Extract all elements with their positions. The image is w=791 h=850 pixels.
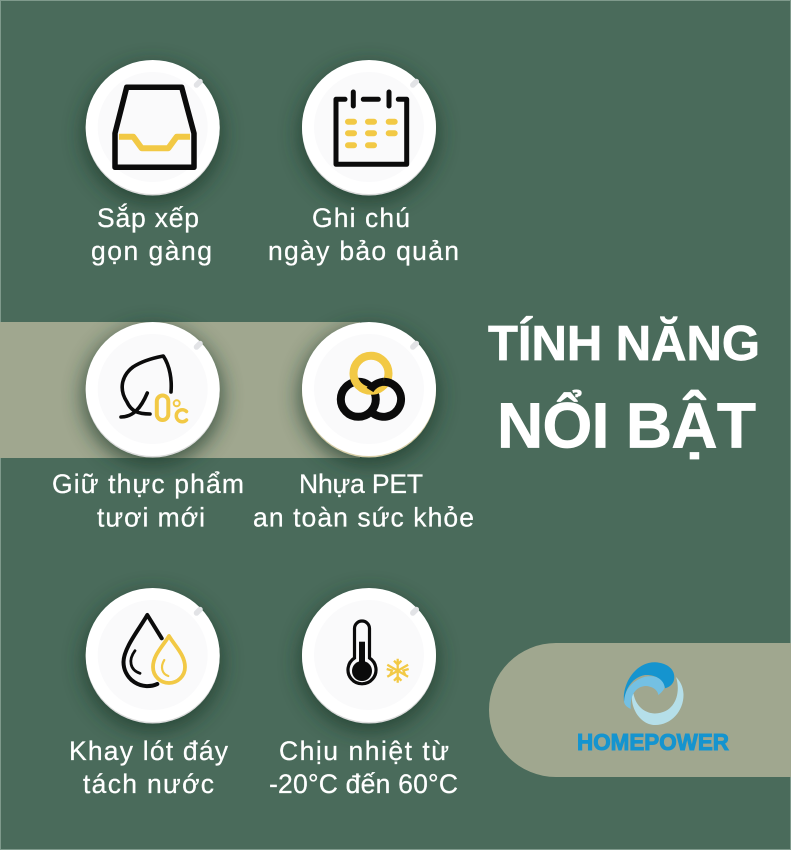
label: thermometer: Chịu nhiệt từ — [279, 736, 449, 766]
label: rings: an toàn sức khỏe — [253, 502, 474, 532]
label: calendar: Ghi chú — [312, 203, 410, 233]
icon button: calendar — [299, 60, 439, 204]
label: rings — [253, 469, 474, 532]
label: tray: gọn gàng — [91, 236, 212, 266]
icon button: thermometer — [299, 588, 439, 732]
label: water drops: Khay lót đáy — [69, 736, 229, 766]
label: leaf: Giữ thực phẩm — [52, 469, 244, 499]
logo pill — [489, 643, 791, 777]
label: tray: Sắp xếp — [97, 203, 199, 233]
sage band behind middle row — [0, 322, 360, 458]
icon button: leaf — [83, 322, 223, 466]
title: TÍNH NĂNG — [488, 317, 760, 371]
icon button: rings — [299, 322, 439, 466]
title — [488, 317, 760, 462]
label: thermometer: -20°C đến 60°C — [269, 769, 458, 799]
label: water drops: tách nước — [83, 769, 214, 799]
title: NỔI BẬT — [497, 389, 756, 462]
logo swirl — [624, 662, 684, 725]
label: calendar: ngày bảo quản — [268, 236, 459, 266]
icon button: tray — [83, 60, 223, 204]
label: leaf — [52, 469, 244, 532]
label: calendar — [268, 203, 459, 266]
label: tray — [91, 203, 212, 266]
logo: HOMEPOWER — [577, 662, 729, 755]
icon button: water drops — [83, 588, 223, 732]
label: leaf: tươi mới — [97, 502, 205, 532]
label: rings: Nhựa PET — [299, 469, 423, 499]
label: water drops — [69, 736, 229, 799]
label: thermometer — [269, 736, 458, 799]
logo wordmark: HOMEPOWER — [577, 729, 729, 755]
